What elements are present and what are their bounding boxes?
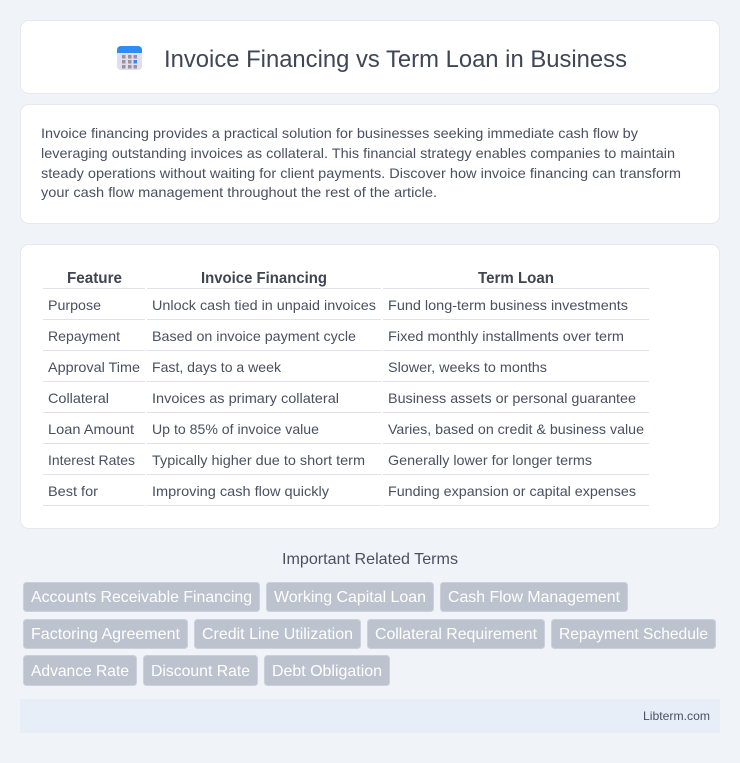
row: interest rates: Interest Rates bbox=[48, 452, 135, 468]
tag bbox=[144, 656, 258, 686]
intro text: your cash flow management throughout the rest of the article. bbox=[41, 184, 437, 200]
tag: Debt Obligation bbox=[272, 663, 382, 680]
footer bar bbox=[20, 699, 720, 733]
table header bbox=[67, 270, 554, 287]
row: loan amount: Loan Amount bbox=[48, 421, 134, 437]
panel: comparison table bbox=[20, 244, 720, 528]
tag: Factoring Agreement bbox=[31, 626, 181, 643]
tag: Repayment Schedule bbox=[559, 626, 708, 643]
tag: Cash Flow Management bbox=[448, 589, 621, 606]
tag: Advance Rate bbox=[31, 663, 129, 680]
row: approval time: Fast, days to a week bbox=[152, 359, 282, 375]
row: best for: Funding expansion or capital expenses bbox=[388, 483, 636, 499]
row: repayment bbox=[48, 328, 624, 344]
tag bbox=[194, 620, 360, 648]
row: interest rates: Generally lower for longer terms bbox=[388, 452, 592, 468]
intro text: steady operations without waiting for client payments. Discover how invoice financing can transform bbox=[41, 165, 681, 181]
tag: Working Capital Loan bbox=[274, 589, 426, 606]
panel: header bbox=[20, 20, 720, 94]
intro text: Invoice financing provides a practical solution for businesses seeking immediate cash flow by bbox=[41, 125, 638, 141]
row: best for: Improving cash flow quickly bbox=[152, 483, 329, 499]
table rules bbox=[43, 288, 649, 506]
row: collateral: Collateral bbox=[48, 390, 109, 406]
intro text bbox=[41, 125, 681, 200]
row: interest rates bbox=[48, 452, 592, 468]
row: interest rates: Typically higher due to short term bbox=[152, 452, 365, 468]
row: collateral: Invoices as primary collateral bbox=[152, 390, 339, 406]
row: approval time bbox=[48, 359, 547, 375]
row: best for bbox=[48, 483, 636, 499]
tag bbox=[264, 656, 390, 686]
row: loan amount: Up to 85% of invoice value bbox=[152, 421, 319, 437]
row: loan amount bbox=[48, 421, 644, 437]
tag: Collateral Requirement bbox=[375, 626, 538, 643]
heading: related terms: Important Related Terms bbox=[282, 551, 458, 568]
tag: Accounts Receivable Financing bbox=[31, 589, 252, 606]
row: repayment: Fixed monthly installments over term bbox=[388, 328, 624, 344]
row: repayment: Based on invoice payment cycle bbox=[152, 328, 356, 344]
row: loan amount: Varies, based on credit & business value bbox=[388, 421, 644, 437]
intro text: leveraging outstanding invoices as collateral. This financial strategy enables companies to maintain bbox=[41, 145, 675, 161]
tag bbox=[552, 620, 716, 648]
row: approval time: Slower, weeks to months bbox=[388, 359, 547, 375]
tag group: related terms bbox=[24, 582, 716, 686]
title: Invoice Financing vs Term Loan in Business bbox=[164, 46, 627, 73]
footer credit: Libterm.com bbox=[643, 709, 710, 723]
row: repayment: Repayment bbox=[48, 328, 120, 344]
row: best for: Best for bbox=[48, 483, 98, 499]
row: purpose bbox=[48, 297, 628, 313]
row: purpose: Purpose bbox=[48, 297, 101, 313]
tag bbox=[24, 656, 136, 686]
tag bbox=[266, 582, 434, 612]
tag bbox=[24, 620, 188, 648]
row: collateral bbox=[48, 390, 636, 406]
row: purpose: Unlock cash tied in unpaid invoices bbox=[152, 297, 376, 313]
tag bbox=[24, 582, 260, 612]
table header: Feature bbox=[67, 270, 122, 287]
table header: Term Loan bbox=[478, 270, 554, 287]
table header: Invoice Financing bbox=[201, 270, 327, 287]
icon: calendar bbox=[117, 46, 142, 70]
panel: introduction bbox=[20, 104, 720, 224]
row: collateral: Business assets or personal guarantee bbox=[388, 390, 636, 406]
tag bbox=[440, 582, 628, 612]
tag bbox=[368, 620, 544, 648]
tag: Discount Rate bbox=[151, 663, 250, 680]
tag: Credit Line Utilization bbox=[202, 626, 353, 643]
row: purpose: Fund long-term business investments bbox=[388, 297, 628, 313]
row: approval time: Approval Time bbox=[48, 359, 140, 375]
